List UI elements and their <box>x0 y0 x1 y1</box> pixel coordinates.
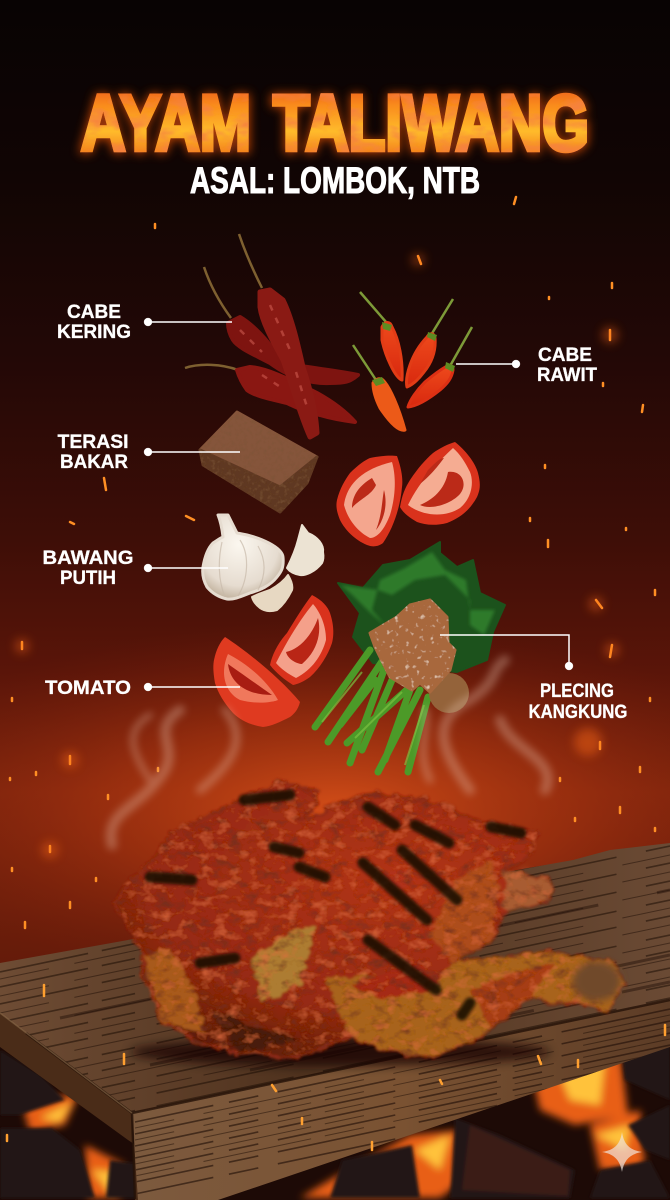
ember glow <box>15 254 619 858</box>
icon: tomato wedges lower <box>213 595 333 727</box>
title: AYAM TALIWANG <box>80 78 590 168</box>
label: terasi bakar: BAKAR <box>60 452 128 473</box>
grilled chicken <box>115 782 624 1057</box>
title: AYAM TALIWANG: AYAM <box>81 78 251 167</box>
embers over board <box>7 985 665 1150</box>
icon: grilled shrimp paste block <box>200 412 317 512</box>
icon: tomato wedges upper <box>336 442 480 546</box>
icon: plecing kangkung <box>315 542 505 772</box>
icon: garlic <box>203 515 323 611</box>
icon: dried chilies <box>185 234 358 437</box>
label: bawang putih: PUTIH <box>60 568 116 589</box>
label: cabe rawit: RAWIT <box>537 365 597 386</box>
smoke <box>111 660 548 945</box>
label: cabe kering <box>57 302 232 343</box>
label: tomato <box>45 678 240 699</box>
label: tomato: TOMATO <box>45 678 131 699</box>
coals and fire <box>0 1020 670 1200</box>
label: plecing kangkung <box>440 635 628 723</box>
title: AYAM TALIWANG: AYAM <box>80 79 252 168</box>
label: cabe kering: CABE <box>67 302 121 323</box>
label: cabe kering: KERING <box>57 322 131 343</box>
icon: bird's eye chilies <box>353 292 472 430</box>
label: bawang putih: BAWANG <box>42 548 134 569</box>
label: cabe rawit <box>456 345 597 386</box>
sparkle watermark <box>602 1132 642 1172</box>
label: cabe rawit: CABE <box>538 345 592 366</box>
labels <box>42 302 628 723</box>
subtitle: origin: ASAL: LOMBOK, NTB <box>190 160 480 201</box>
wooden board <box>0 831 670 1200</box>
embers <box>10 197 655 928</box>
label: terasi bakar: TERASI <box>58 432 128 453</box>
label: terasi bakar <box>58 432 240 473</box>
label: plecing kangkung: PLECING <box>540 681 614 702</box>
label: plecing kangkung: KANGKUNG <box>528 702 628 723</box>
label: bawang putih <box>42 548 228 589</box>
